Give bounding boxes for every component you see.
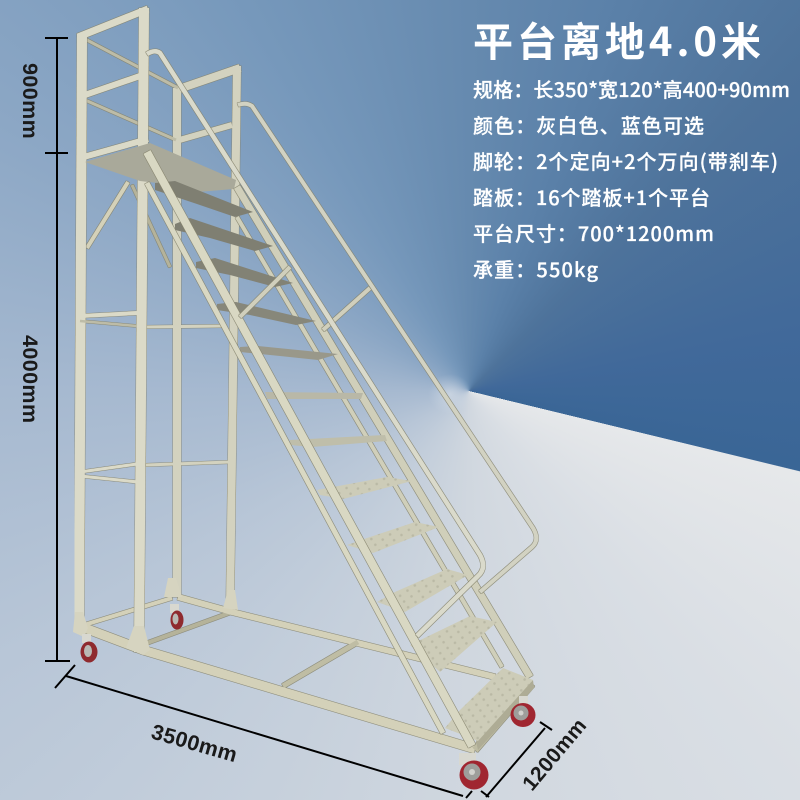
caster: front left: [80, 634, 98, 662]
front stringers: [147, 152, 472, 746]
title: 平台离地4.0米: [473, 10, 761, 68]
tread 3: [196, 258, 293, 287]
label: 3500mm: 3500mm: [149, 720, 240, 767]
tread 4: [217, 302, 316, 325]
tread 1: [155, 181, 253, 217]
corner gussets: [73, 578, 238, 655]
tread 9: [347, 522, 439, 553]
caster: rear left: [170, 604, 184, 630]
spec: load: 承重：550kg: [473, 254, 598, 283]
spec: colours: 颜色：灰白色、蓝色可选: [473, 110, 704, 139]
spec: casters: 脚轮：2个定向+2个万向(带刹车): [473, 146, 778, 175]
spec: dimensions: 规格：长350*宽120*高400+90mm: [473, 74, 790, 103]
tread 11: [410, 616, 497, 672]
label: 4000mm: 4000mm: [18, 335, 42, 423]
ladder front frame: [78, 8, 148, 652]
front handrail: [147, 51, 483, 636]
label: 900mm: 900mm: [18, 63, 42, 139]
tread 10: [377, 569, 468, 612]
dimension: height lines: [45, 38, 70, 661]
ladder rear frame: [85, 39, 240, 610]
back handrail: [238, 104, 536, 592]
tread 2: [175, 218, 273, 251]
horizon glow: [428, 374, 472, 414]
spec: treads: 踏板：16个踏板+1个平台: [473, 182, 710, 211]
tread 8: [317, 477, 412, 499]
dimension: length line: [55, 665, 472, 798]
tread 7: [290, 435, 387, 447]
tread 6: [265, 392, 363, 399]
tread 5: [240, 346, 338, 360]
platform deck: [85, 143, 236, 192]
spec: platform size: 平台尺寸：700*1200mm: [473, 218, 714, 247]
caster: front right: [459, 753, 488, 790]
tread 12: [445, 668, 534, 750]
dimension: width line: [481, 722, 552, 797]
base frame: [82, 182, 532, 750]
label: 1200mm: 1200mm: [518, 714, 591, 795]
back stringers: [237, 187, 530, 677]
handrail cross bars: [240, 267, 370, 330]
caster: rear right: [510, 696, 536, 727]
